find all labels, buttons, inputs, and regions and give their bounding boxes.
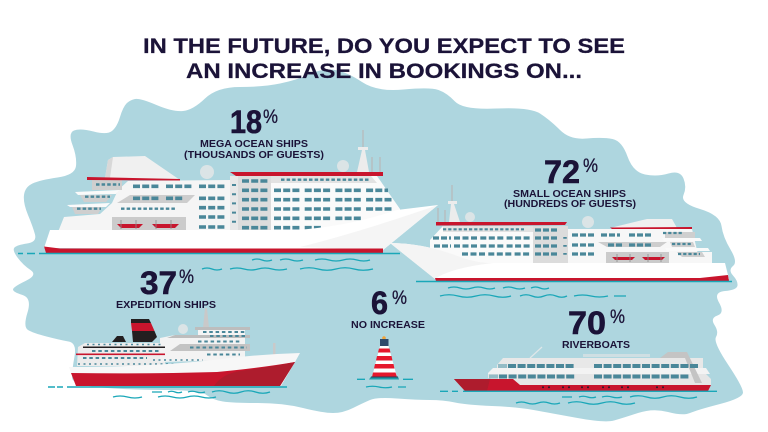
superstructure: [430, 226, 533, 263]
mast and spheres: [200, 130, 380, 179]
hull: [69, 353, 300, 386]
windows: [77, 180, 393, 235]
decks: [497, 358, 703, 368]
superstructure: [77, 343, 165, 366]
wheelhouse: [660, 352, 702, 383]
stat: expedition ships 37%: 37: [140, 265, 177, 301]
stat: small ocean ships 72%: 72: [544, 154, 580, 190]
title: [143, 35, 625, 83]
funnel: [105, 156, 180, 180]
stat: mega ocean ships 18%: (THOUSANDS OF GUESTS): [184, 149, 324, 161]
stat: expedition ships 37%: EXPEDITION SHIPS: [116, 299, 216, 311]
mast and sphere: [178, 308, 276, 355]
waterline: [48, 386, 287, 388]
stat: no increase 6%: [351, 285, 425, 331]
stat: mega ocean ships 18%: %: [263, 107, 278, 128]
bow rail and roof rail: [530, 347, 650, 358]
stat: mega ocean ships 18%: MEGA OCEAN SHIPS: [200, 138, 308, 150]
stat: no increase 6%: %: [392, 288, 407, 309]
stat: small ocean ships 72%: (HUNDREDS OF GUESTS): [504, 198, 636, 210]
windows: [78, 332, 247, 370]
title: AN INCREASE IN BOOKINGS ON...: [186, 60, 582, 83]
waterline: [416, 280, 732, 282]
stat: no increase 6%: 6: [371, 285, 388, 321]
portholes: [542, 386, 664, 388]
stat: no increase 6%: NO INCREASE: [351, 319, 425, 331]
funnel: [112, 319, 157, 342]
stat: small ocean ships 72%: %: [583, 156, 598, 177]
mast and spheres: [438, 185, 594, 228]
stat: riverboats 70%: [562, 305, 630, 351]
hull: [454, 379, 711, 391]
funnel: [610, 219, 677, 228]
ship: riverboat: [440, 347, 717, 404]
lifeboats: [117, 220, 179, 229]
waves: [113, 391, 270, 398]
stat: small ocean ships 72%: [504, 154, 636, 210]
waterline: [440, 390, 717, 392]
waves: [202, 259, 373, 270]
waterline: [18, 252, 400, 254]
stat: expedition ships 37%: %: [179, 267, 194, 288]
hull: [390, 243, 729, 279]
stat: riverboats 70%: %: [610, 307, 625, 328]
superstructure: [58, 180, 230, 232]
ship: small ocean ship: [390, 185, 732, 297]
title: IN THE FUTURE, DO YOU EXPECT TO SEE: [143, 35, 625, 58]
stat: mega ocean ships 18%: [184, 104, 324, 161]
stat: small ocean ships 72%: SMALL OCEAN SHIPS: [513, 188, 626, 200]
lifeboats: [612, 254, 665, 262]
stat: riverboats 70%: RIVERBOATS: [562, 339, 630, 351]
waves: [516, 396, 697, 404]
decks: [665, 232, 695, 238]
ship: mega ocean ship: [18, 130, 438, 270]
background sea blob: [13, 70, 743, 421]
icon: buoy: [357, 336, 413, 388]
windows: [433, 229, 700, 261]
rear decks: [92, 180, 122, 190]
windows: [489, 364, 698, 378]
ship: expedition ship: [48, 308, 300, 398]
stat: mega ocean ships 18%: 18: [230, 104, 262, 140]
waves: [440, 287, 626, 297]
stat: riverboats 70%: 70: [568, 305, 606, 341]
hull: [44, 205, 438, 250]
stat: expedition ships 37%: [116, 265, 216, 311]
